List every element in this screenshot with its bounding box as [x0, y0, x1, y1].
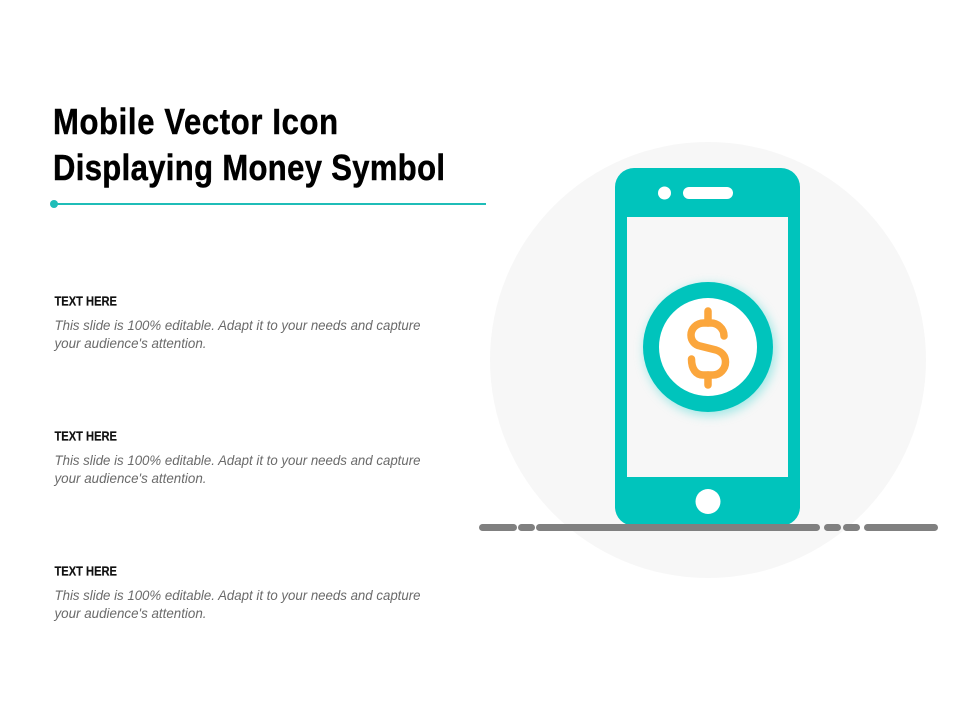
text block 2: This slide is 100% editable. Adapt it to your needs and capture: [54, 452, 421, 468]
text block 3: TEXT HERE: [54, 564, 117, 578]
text block 3: This slide is 100% editable. Adapt it to your needs and capture: [54, 587, 421, 603]
title: Displaying Money Symbol: [53, 149, 445, 189]
phone screen: [627, 217, 788, 477]
text block 1: your audience's attention.: [54, 335, 207, 351]
text block 1: TEXT HERE: [54, 294, 117, 308]
text block 2: [54, 428, 421, 486]
title divider line with dot: [50, 200, 486, 208]
icon: mobile phone: [615, 168, 800, 526]
text block 3: your audience's attention.: [54, 605, 207, 621]
title: Mobile Vector Icon: [53, 103, 338, 143]
text block 3: [54, 564, 421, 621]
phone home button: [696, 489, 720, 514]
icon: dollar coin: [643, 282, 776, 416]
coin centre: [659, 298, 757, 396]
title: [53, 103, 445, 189]
background circle: [490, 142, 926, 578]
text block 2: your audience's attention.: [54, 470, 207, 486]
ground line: [479, 524, 938, 531]
phone speaker: [683, 187, 733, 199]
text block 1: [54, 294, 421, 351]
phone body: [615, 168, 800, 526]
coin glow: [644, 284, 776, 416]
dollar symbol: [691, 311, 726, 385]
coin ring: [643, 282, 773, 412]
phone camera dot: [658, 186, 671, 200]
text block 2: TEXT HERE: [54, 428, 117, 444]
text block 1: This slide is 100% editable. Adapt it to your needs and capture: [54, 317, 421, 333]
